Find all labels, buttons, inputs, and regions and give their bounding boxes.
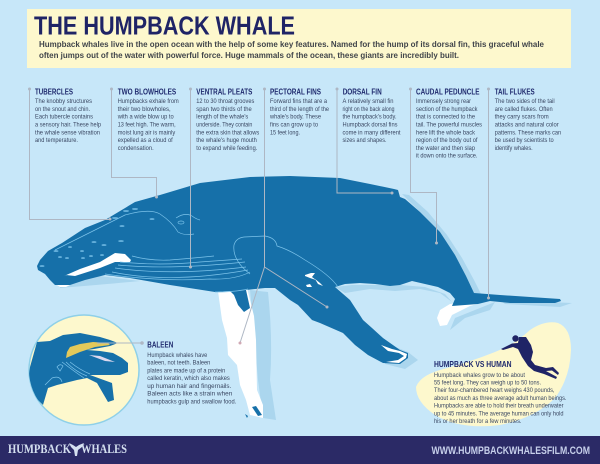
panel: humpback vs human — [416, 322, 571, 426]
body text: his or her breath for a few minutes. — [434, 418, 522, 425]
label: dorsal fin: the humpback's body. — [342, 114, 397, 121]
label: ventral pleats: VENTRAL PLEATS — [196, 88, 253, 96]
intro text: Humpback whales live in the open ocean with the help of some key features. Named for the hump of its dorsal fin, this graceful whale — [39, 39, 544, 49]
label: tail flukes: attacks and natural color — [495, 122, 559, 128]
label: two blowholes: with a wide blow up to — [117, 114, 174, 121]
baleen plates — [66, 342, 110, 358]
label: two blowholes: condensation. — [118, 145, 154, 152]
label: two blowholes: their two blowholes, — [118, 106, 171, 113]
leader: tail flukes — [487, 88, 490, 300]
label: pectoral fins: Forward fins that are a — [270, 98, 327, 105]
label: baleen: baleen, not teeth. Baleen — [147, 360, 211, 367]
label: pectoral fins: whale's body. These — [269, 114, 321, 121]
whale shadows — [60, 194, 572, 420]
label: baleen: Baleen acts like a strain when — [147, 391, 233, 398]
label: caudal peduncle — [416, 88, 482, 160]
label: tail flukes: they carry scars from — [495, 114, 549, 121]
label: pectoral fins: third of the length of the — [270, 106, 329, 113]
label: baleen — [147, 340, 237, 406]
label: tail flukes: TAIL FLUKES — [495, 88, 535, 96]
label: baleen: humpbacks gulp and swallow food. — [147, 398, 237, 406]
body text: Their four-chambered heart weighs 430 pounds, — [434, 387, 555, 394]
label: ventral pleats: the extra skin that allows — [196, 129, 259, 136]
label: tubercles: The knobby structures — [35, 98, 92, 105]
leader: caudal peduncle — [409, 88, 438, 244]
label: caudal peduncle: region of the body out of — [416, 137, 478, 144]
flipper tip marks — [245, 406, 262, 418]
label: pectoral fins — [269, 88, 329, 136]
label: baleen: BALEEN — [147, 340, 173, 350]
label: dorsal fin: Humpback dorsal fins — [342, 122, 398, 128]
label: caudal peduncle: CAUDAL PEDUNCLE — [416, 88, 480, 96]
label: caudal peduncle: the water and then slap — [416, 145, 475, 152]
icon: scuba diver — [501, 335, 559, 379]
label: pectoral fins: fins can grow up to — [270, 122, 318, 128]
film logo: HUMPBACK — [8, 441, 72, 456]
whale body — [37, 176, 561, 364]
label: dorsal fin: right on the back along — [342, 106, 395, 113]
label: ventral pleats: length of the whale's — [196, 114, 248, 121]
white edges — [57, 253, 407, 363]
label: caudal peduncle: it down onto the surface. — [416, 152, 478, 160]
label: two blowholes: expelled as a cloud of — [118, 137, 173, 144]
body text: up to 45 minutes. The average human can only hold — [434, 410, 564, 418]
label: ventral pleats: span two thirds of the — [196, 106, 252, 113]
label: baleen: up human hair and fingernails. — [147, 383, 232, 390]
label: tail flukes — [495, 88, 562, 152]
whale head close-up — [28, 333, 128, 405]
leader: dorsal fin — [336, 88, 394, 194]
white scars on far flipper and fluke — [437, 300, 488, 326]
heading: HUMPBACK VS HUMAN — [434, 360, 512, 369]
label: pectoral fins: PECTORAL FINS — [270, 88, 321, 96]
label: ventral pleats: 12 to 30 throat grooves — [196, 98, 254, 105]
title banner — [27, 9, 571, 68]
label: tail flukes: be used by scientists to — [495, 137, 554, 144]
label: two blowholes — [117, 88, 179, 152]
whale illustration — [37, 176, 572, 420]
film logo — [8, 441, 127, 456]
label: two blowholes: 13 feet high. The warm, — [118, 122, 176, 128]
label: tail flukes: are called flukes. Often — [495, 106, 553, 113]
label: tubercles: a sensory hair. These help — [35, 122, 101, 128]
label: ventral pleats: to expand while feeding. — [196, 145, 258, 152]
body text: 55 feet long. They can weigh up to 50 tons. — [434, 380, 541, 386]
near pectoral fin, white underside — [218, 288, 263, 418]
label: ventral pleats: the whale's huge mouth — [196, 137, 257, 144]
label: ventral pleats: underside. They contain — [196, 122, 253, 128]
label: dorsal fin: DORSAL FIN — [343, 88, 382, 96]
label: ventral pleats — [196, 88, 259, 152]
body text: about as much as three average adult human beings. — [434, 395, 567, 402]
body text: Humpbacks are able to hold their breath underwater — [434, 403, 564, 410]
pleats and body contour lines — [55, 211, 338, 292]
cream blob — [416, 322, 571, 426]
label: tubercles — [35, 88, 101, 144]
label: two blowholes: Humpbacks exhale from — [118, 98, 179, 105]
label: two blowholes: TWO BLOWHOLES — [118, 88, 177, 96]
leader: two blowholes — [110, 88, 158, 198]
label: tubercles: TUBERCLES — [35, 88, 73, 96]
label: tail flukes: The two sides of the tail — [495, 98, 555, 105]
label: caudal peduncle: section of the humpback — [416, 106, 478, 113]
label: dorsal fin: A relatively small fin — [342, 98, 394, 105]
tongue — [89, 355, 115, 362]
label: tail flukes: identify whales. — [495, 145, 533, 152]
label: caudal peduncle: here lift the whole back — [416, 129, 476, 136]
leader: tubercles — [28, 88, 112, 220]
label: tubercles: on the snout and chin. — [35, 106, 90, 113]
label: caudal peduncle: that is connected to the — [416, 114, 475, 121]
film logo: WHALES — [81, 441, 127, 456]
intro text — [39, 39, 544, 60]
intro text: often jumps out of the water with powerful force. Huge mammals of the ocean, these giants are incredibly built. — [39, 50, 459, 60]
label: tubercles: Each tubercle contains — [35, 114, 93, 121]
body text: Humpback whales grow to be about — [434, 372, 525, 379]
skin bumps — [40, 208, 154, 267]
label: dorsal fin: come in many different — [342, 129, 401, 136]
baleen inset circle — [28, 315, 139, 425]
label: baleen: called keratin, which also makes — [147, 375, 230, 382]
label: baleen: plates are made up of a protein — [147, 368, 226, 374]
label: pectoral fins: 15 feet long. — [270, 129, 300, 136]
leader: ventral pleats — [189, 88, 192, 268]
label: tubercles: the whale sense vibration — [35, 129, 100, 136]
label: dorsal fin: sizes and shapes. — [342, 137, 387, 144]
label: caudal peduncle: tail. The powerful muscles — [416, 122, 482, 128]
label: dorsal fin — [342, 88, 401, 144]
label: baleen: Humpback whales have — [147, 352, 208, 359]
throat lines — [45, 362, 90, 385]
label: caudal peduncle: Immensely strong rear — [416, 98, 471, 105]
leader lines — [28, 88, 490, 345]
footer bar — [0, 436, 600, 464]
label: two blowholes: moist lung air is mainly — [118, 129, 176, 136]
label: tubercles: and temperature. — [35, 137, 78, 144]
leader: baleen — [97, 341, 144, 345]
label: tail flukes: patterns. These marks can — [495, 129, 562, 136]
title: THE HUMPBACK WHALE — [34, 12, 295, 40]
leader: pectoral fins — [238, 88, 328, 344]
body text — [434, 372, 567, 425]
